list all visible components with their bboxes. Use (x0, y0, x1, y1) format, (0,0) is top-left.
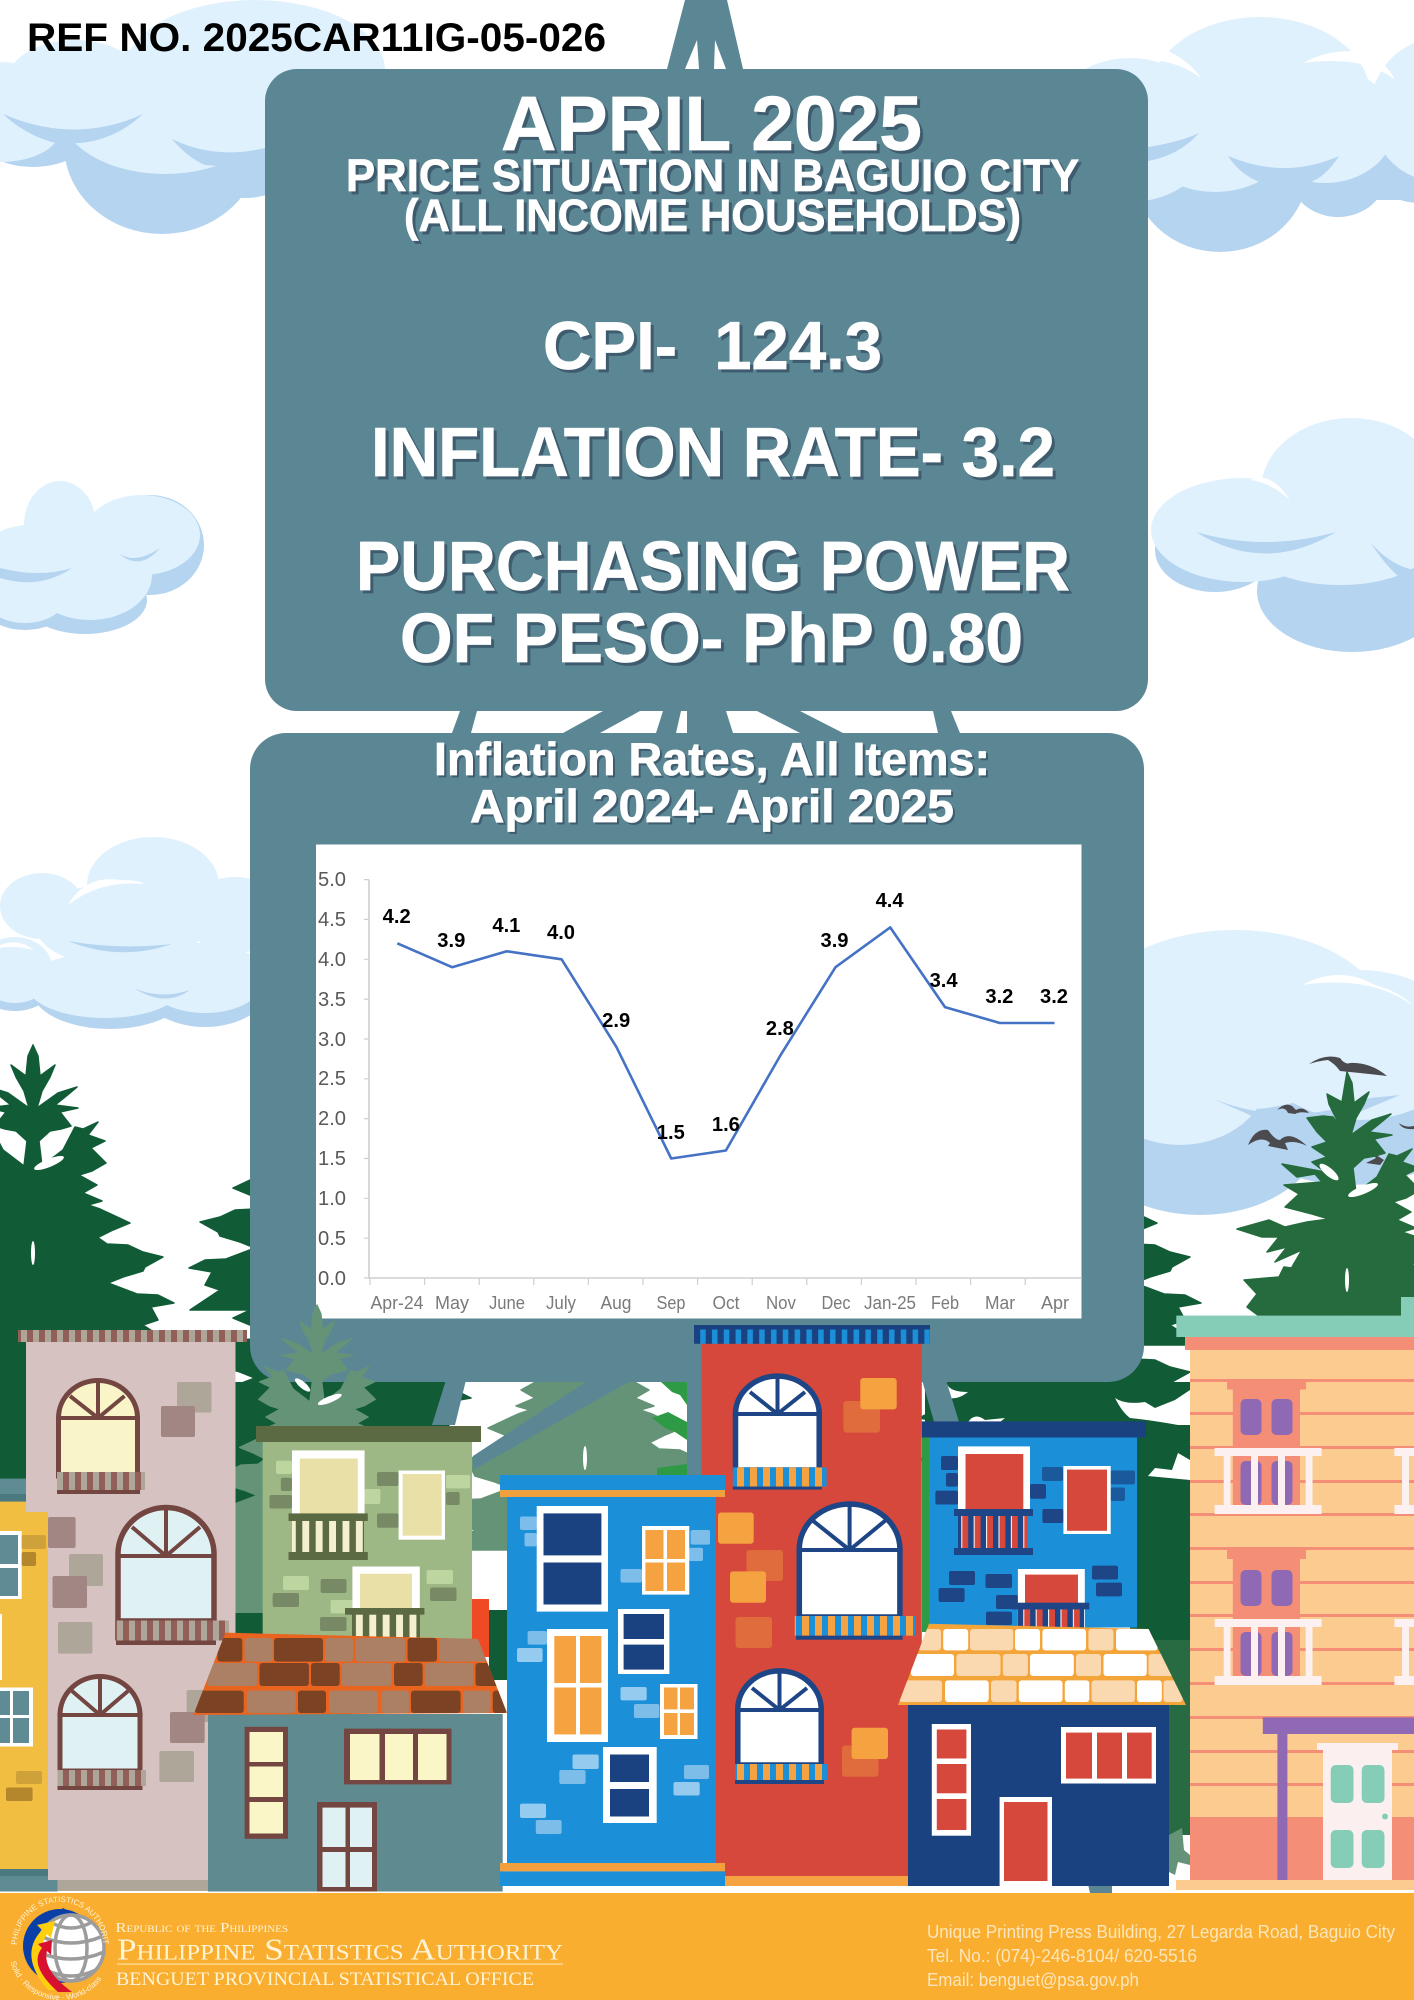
data labels: 3.9 (437, 930, 465, 952)
arched window 3 (58, 1676, 146, 1790)
data labels: 4.0 (547, 922, 575, 944)
x axis labels: Feb (931, 1293, 959, 1313)
arched window 2 (115, 1507, 229, 1645)
data labels: 3.4 (930, 970, 958, 992)
y axis labels: 3.5 (318, 989, 346, 1011)
x axis labels: May (435, 1293, 469, 1313)
headings and key figures: (ALL INCOME HOUSEHOLDS) (404, 190, 1021, 241)
cloud: lower left (0, 837, 285, 1029)
office address: Tel. No.: (074)-246-8104/ 620-5516 (927, 1946, 1197, 1966)
data labels: 1.6 (712, 1114, 740, 1136)
data labels: 3.2 (1040, 986, 1068, 1008)
data labels (383, 890, 1068, 1144)
background trees (0, 1010, 1414, 1875)
peach house upper window and balcony (1215, 1380, 1414, 1514)
headings and key figures: INFLATION RATE- 3.2 (371, 413, 1055, 491)
data labels: 2.8 (766, 1018, 794, 1040)
x axis labels: Dec (822, 1293, 850, 1313)
small blue house windows (954, 1446, 1111, 1630)
data labels: 3.9 (820, 930, 848, 952)
x axis labels: Aug (600, 1293, 632, 1313)
x axis labels: Sep (656, 1293, 686, 1313)
roof tiles (195, 1638, 507, 1713)
house: blue tall (500, 1475, 725, 1893)
data labels: 4.4 (876, 890, 904, 912)
arched window 1 (56, 1380, 145, 1494)
data labels: 1.5 (657, 1122, 685, 1144)
PSA logo: PHILIPPINE STATISTICS AUTHORITY (11, 1896, 109, 1944)
red house arched window 2 (795, 1503, 915, 1640)
cloud: lower right (1075, 930, 1414, 1215)
PSA logo (10, 1896, 109, 2000)
data labels: 4.1 (492, 915, 520, 937)
sign post: legs below chart panel (432, 1380, 1112, 1893)
house: navy with cream roof (898, 1624, 1186, 1886)
agency name block: Philippine Statistics Authority (117, 1931, 563, 1966)
cloud: middle right (1151, 418, 1414, 652)
blue house windows (537, 1506, 698, 1823)
sign post: legs between panels (452, 711, 960, 733)
reference number: REF NO. 2025CAR11IG-05-026 (27, 16, 606, 60)
y axis labels: 3.0 (318, 1029, 346, 1051)
agency name block (116, 1920, 563, 1990)
y axis labels: 5.0 (318, 869, 346, 891)
data labels: 3.2 (985, 986, 1013, 1008)
light fir in front of panel (204, 1305, 430, 1545)
panel: price situation (27, 16, 1148, 711)
navy house windows and door (932, 1724, 1156, 1886)
y axis labels: 4.5 (318, 909, 346, 931)
chart title: Inflation Rates, All Items: (434, 733, 990, 785)
x axis labels (370, 1293, 1069, 1313)
birds behind tree (1248, 1056, 1414, 1165)
headings and key figures (346, 81, 1079, 677)
house: yellow (0, 1479, 58, 1892)
x axis labels: Nov (766, 1293, 796, 1313)
sign post: top legs (667, 0, 743, 69)
headings and key figures: PURCHASING POWER (356, 527, 1070, 605)
teal house windows and door (245, 1727, 452, 1892)
data labels: 4.2 (383, 906, 411, 928)
y axis labels: 2.5 (318, 1068, 346, 1090)
y axis labels (318, 869, 346, 1290)
cloud: top right (1045, 17, 1414, 252)
house: green (256, 1426, 481, 1642)
green house windows (288, 1450, 445, 1640)
headings and key figures: OF PESO- PhP 0.80 (400, 599, 1023, 677)
line chart (316, 844, 1082, 1318)
agency name block: BENGUET PROVINCIAL STATISTICAL OFFICE (116, 1969, 534, 1990)
cloud: middle left (0, 481, 204, 634)
chart title: April 2024- April 2025 (470, 780, 954, 832)
data labels: 2.9 (602, 1010, 630, 1032)
cloud: top left (0, 0, 385, 234)
x axis labels: July (546, 1293, 576, 1313)
panel: inflation chart (250, 733, 1144, 1382)
office address: Unique Printing Press Building, 27 Legarda Road, Baguio City (927, 1922, 1395, 1942)
house: pink (18, 1330, 247, 1891)
agency name block: Republic of the Philippines (116, 1920, 288, 1935)
y axis labels: 2.0 (318, 1108, 346, 1130)
headings and key figures: APRIL 2025 (501, 81, 922, 167)
inflation line (397, 927, 1054, 1158)
y axis labels: 0.5 (318, 1228, 346, 1250)
headings and key figures: PRICE SITUATION IN BAGUIO CITY (346, 150, 1079, 201)
house: teal with tiled roof (193, 1633, 507, 1892)
x axis labels: Oct (712, 1293, 740, 1313)
house: blue small (922, 1421, 1146, 1630)
x axis labels: Mar (985, 1293, 1015, 1313)
office address: Email: benguet@psa.gov.ph (927, 1970, 1139, 1990)
y axis labels: 0.0 (318, 1268, 346, 1290)
x axis labels: June (489, 1293, 525, 1313)
y axis labels: 4.0 (318, 949, 346, 971)
cream roof tiles (899, 1629, 1183, 1702)
y axis labels: 1.0 (318, 1188, 346, 1210)
house: red (694, 1325, 930, 1886)
x axis labels: Apr (1041, 1293, 1069, 1313)
headings and key figures: CPI- 124.3 (543, 308, 882, 384)
peach house lower window and balcony (1215, 1549, 1414, 1685)
x axis labels: Jan-25 (864, 1293, 916, 1313)
red house arched window 1 (733, 1376, 827, 1490)
house: peach (1176, 1297, 1414, 1890)
red house arched window 3 (735, 1671, 828, 1784)
chart title (434, 733, 990, 832)
office address (927, 1922, 1395, 1990)
x axis labels: Apr-24 (370, 1293, 424, 1313)
y axis labels: 1.5 (318, 1148, 346, 1170)
peach house awning and door (1263, 1717, 1414, 1880)
